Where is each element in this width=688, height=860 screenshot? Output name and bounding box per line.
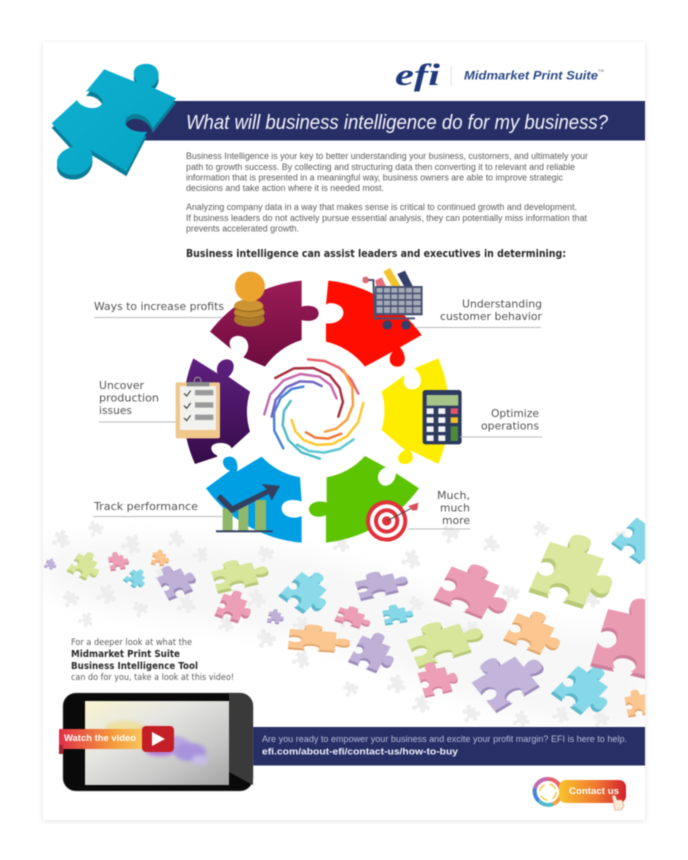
bottom call-to-action band: Are you ready to empower your business and excite your profit margin? EFI is here to help. (262, 734, 627, 744)
contact us logo swirl (535, 779, 561, 805)
piece: orange right (502, 611, 560, 656)
intro paragraph: decisions and take action where it is needed most. (186, 183, 384, 193)
bottom call-to-action band: efi.com/about-efi/contact-us/how-to-buy (262, 746, 459, 758)
bottom call-to-action band (250, 727, 645, 766)
video intro text: Business Intelligence Tool (71, 661, 198, 672)
label: much, much more (408, 490, 470, 529)
label: uncover production issues: production (99, 392, 159, 404)
contact us button: Contact us (569, 786, 619, 797)
label: uncover production issues (99, 380, 176, 422)
label: uncover production issues: Uncover (99, 380, 145, 392)
label: ways to increase profits: Ways to increase profits (94, 301, 224, 313)
wheel piece: green (309, 456, 419, 543)
second paragraph (186, 202, 587, 234)
second paragraph: Analyzing company data in a way that makes sense is critical to continued growth and development. (186, 202, 577, 212)
centre swirl (264, 359, 363, 459)
label: uncover production issues: issues (99, 405, 132, 417)
piece: purple lower (348, 632, 394, 674)
video intro text: For a deeper look at what the (71, 638, 192, 648)
piece: purple flat (354, 571, 408, 602)
contact us button (559, 780, 626, 803)
piece: teal lower (550, 665, 608, 716)
icon: target with dart (366, 500, 418, 542)
piece: large pink (433, 564, 508, 620)
piece: pink flat (334, 606, 371, 630)
wheel piece: yellow (382, 358, 449, 464)
label: much, much more: Much, (437, 490, 470, 502)
piece: pink (214, 590, 252, 624)
logo: EFI Midmarket Print Suite: TM (598, 68, 604, 73)
piece: large green (528, 534, 613, 610)
watch the video ribbon: Watch the video (64, 733, 136, 744)
video intro text: can do for you, take a look at this video! (71, 673, 234, 683)
wheel piece: red (326, 281, 422, 367)
piece: teal (278, 572, 327, 614)
faint background puzzle texture (43, 518, 645, 730)
label: much, much more: more (442, 515, 470, 527)
video tablet (59, 693, 253, 791)
piece: large purple (472, 656, 544, 714)
section heading: Business intelligence can assist leaders and executives in determining: (186, 248, 566, 260)
intro paragraph: Business Intelligence is your key to better understanding your business, customers, and ultimately your (186, 151, 588, 161)
icon: coins (234, 272, 265, 327)
icon: large teal puzzle piece (52, 64, 176, 180)
title: What will business intelligence do for my business? (186, 111, 609, 134)
label: optimize operations: operations (481, 420, 539, 432)
icon: shopping cart (362, 268, 423, 330)
piece: small teal (122, 568, 146, 589)
intro paragraph (186, 151, 588, 193)
video thumbnail ribbon of colour (105, 721, 208, 765)
puzzle wheel diagram (176, 268, 462, 543)
wheel piece: blue (206, 457, 302, 543)
piece: purple (156, 566, 196, 602)
label: understanding customer behavior: customer behavior (440, 311, 543, 323)
icon: calculator (423, 390, 462, 444)
logo: EFI Midmarket Print Suite: efi (395, 57, 441, 92)
piece: orange edge (624, 689, 646, 718)
label: track performance (93, 501, 222, 516)
piece: pink lower (417, 662, 458, 698)
label: understanding customer behavior (415, 298, 543, 328)
icon: hand cursor (612, 795, 624, 810)
label: optimize operations (460, 408, 542, 437)
piece: tiny purple (44, 558, 57, 570)
icon: clipboard (176, 377, 220, 438)
second paragraph: If business leaders do not actively pursue essential analysis, they can potentially miss information that (186, 213, 587, 223)
logo: EFI Midmarket Print Suite (395, 57, 604, 92)
intro paragraph: path to growth success. By collecting and structuring data then converting it to relevant and reliable (186, 162, 575, 172)
piece: teal top edge (610, 517, 646, 565)
logo: EFI Midmarket Print Suite: Midmarket Print Suite (464, 68, 598, 82)
piece: tiny purple centre (267, 608, 285, 625)
label: optimize operations: Optimize (491, 408, 539, 420)
piece: small orange (151, 549, 171, 567)
piece: small green (66, 552, 100, 582)
page card (43, 42, 645, 820)
icon: growth chart (216, 484, 280, 532)
second paragraph: prevents accelerated growth. (186, 224, 299, 234)
piece: orange (288, 623, 352, 654)
label: track performance: Track performance (93, 501, 198, 513)
intro paragraph: information that is presented in a meaningful way, business owners are able to improve strategic (186, 172, 563, 182)
piece: small pink (107, 550, 130, 571)
label: much, much more: much (440, 502, 470, 514)
wheel piece: maroon (210, 281, 319, 367)
header band (125, 101, 645, 140)
piece: green lower (406, 622, 484, 670)
piece: green flat (210, 560, 270, 594)
label: understanding customer behavior: Understanding (462, 298, 542, 310)
piece: teal flat (382, 602, 414, 625)
video intro text (71, 638, 234, 683)
video intro text: Midmarket Print Suite (71, 649, 180, 660)
wheel piece: purple (183, 358, 250, 464)
watch the video ribbon (59, 729, 149, 754)
piece: large pink edge (590, 598, 646, 680)
scattered puzzle pieces (44, 510, 688, 722)
play button (142, 726, 174, 752)
